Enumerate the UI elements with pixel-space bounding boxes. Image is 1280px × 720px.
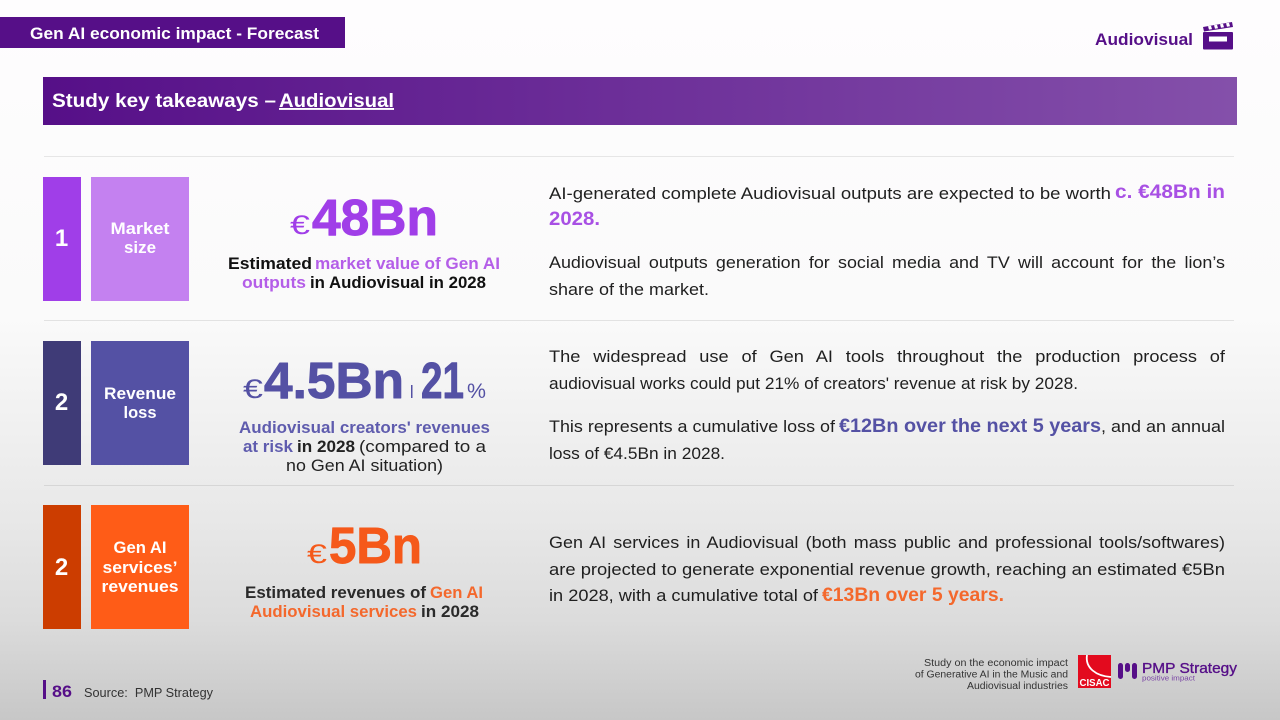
label: gen AI services' revenues: Gen AI xyxy=(114,538,166,557)
stat description: in 2028 xyxy=(297,438,355,456)
body text xyxy=(549,534,1225,606)
stat: 48Bn: € xyxy=(290,210,310,240)
stat description: Estimated xyxy=(228,255,312,273)
body text: This represents a cumulative loss of xyxy=(549,418,835,436)
logo: PMP Strategy xyxy=(1118,661,1238,682)
stat description xyxy=(245,584,483,621)
panel: market size xyxy=(43,177,1225,301)
label: revenue loss: Revenue xyxy=(104,384,176,403)
icon: clapperboard xyxy=(1203,22,1233,50)
stat description: Audiovisual creators' revenues xyxy=(239,419,490,437)
number tab 2 xyxy=(43,341,81,465)
study caption xyxy=(915,658,1068,692)
label: gen AI services' revenues xyxy=(91,505,189,629)
stat description: outputs xyxy=(242,274,306,292)
body text: The widespread use of Gen AI tools throughout the production process of xyxy=(549,348,1225,366)
logo: PMP Strategy: PMP Strategy xyxy=(1142,661,1238,677)
stat description: Gen AI xyxy=(430,584,483,602)
stat: 48Bn: 48Bn xyxy=(312,189,438,246)
number tab 1: 1 xyxy=(55,225,68,252)
label: revenue loss: loss xyxy=(124,403,156,422)
body text: 2028. xyxy=(549,209,600,230)
body text: €12Bn over the next 5 years xyxy=(839,416,1101,437)
body text: , and an annual xyxy=(1101,418,1225,436)
title banner: Study key takeaways – xyxy=(52,91,276,112)
logo: PMP Strategy: positive impact xyxy=(1142,674,1196,682)
body text: Gen AI services in Audiovisual (both mass public and professional tools/softwares) xyxy=(549,534,1225,552)
source note: Source: PMP Strategy xyxy=(84,686,214,700)
title banner xyxy=(43,77,1237,125)
label: market size: size xyxy=(124,238,156,257)
label: gen AI services' revenues: revenues xyxy=(102,577,178,596)
body text: in 2028, with a cumulative total of xyxy=(549,587,818,605)
audiovisual category label with icon xyxy=(1095,22,1233,50)
body text: share of the market. xyxy=(549,281,709,299)
section tag: forecast xyxy=(0,17,345,48)
stat description: Audiovisual services xyxy=(250,603,417,621)
body text xyxy=(549,348,1225,463)
body text xyxy=(549,182,1225,299)
label: market size: Market xyxy=(110,219,170,238)
number tab 2: 2 xyxy=(55,554,68,581)
study caption: Study on the economic impact xyxy=(924,658,1068,669)
body text: audiovisual works could put 21% of creators' revenue at risk by 2028. xyxy=(549,375,1078,393)
stat description: market value of Gen AI xyxy=(315,255,500,273)
stat: 5Bn: € xyxy=(307,539,327,569)
panel: gen AI services revenues xyxy=(43,505,1225,629)
stat description: (compared to a xyxy=(359,438,487,456)
stat description xyxy=(239,419,490,475)
body text: Audiovisual outputs generation for social media and TV will account for the lion’s xyxy=(549,254,1225,272)
body text: are projected to generate exponential revenue growth, reaching an estimated €5Bn xyxy=(549,561,1225,579)
stat description: in 2028 xyxy=(421,603,479,621)
stat description xyxy=(228,255,500,292)
number tab 2 xyxy=(43,505,81,629)
stat description: in Audiovisual in 2028 xyxy=(310,274,486,292)
stat: 4.5Bn and 21%: 4.5Bn xyxy=(264,352,404,409)
body text: loss of €4.5Bn in 2028. xyxy=(549,445,725,463)
number tab 2: 2 xyxy=(55,389,68,416)
body text: c. €48Bn in xyxy=(1115,182,1225,203)
logo: CISAC: CISAC xyxy=(1080,677,1110,689)
study caption: Audiovisual industries xyxy=(967,681,1068,692)
body text: AI-generated complete Audiovisual outputs are expected to be worth xyxy=(549,185,1111,203)
stat description: no Gen AI situation) xyxy=(286,457,443,475)
label: revenue loss xyxy=(91,341,189,465)
label: market size xyxy=(91,177,189,301)
page number xyxy=(43,680,72,701)
number tab 1 xyxy=(43,177,81,301)
study caption: of Generative AI in the Music and xyxy=(915,670,1068,680)
logo: CISAC xyxy=(1078,655,1111,689)
title banner: Audiovisual xyxy=(279,91,394,112)
stat description: at risk xyxy=(243,438,294,456)
label: gen AI services' revenues: services’ xyxy=(102,558,178,577)
stat: 4.5Bn and 21% xyxy=(243,352,486,409)
section tag: forecast: Gen AI economic impact - Forecast xyxy=(30,24,319,43)
stat: 4.5Bn and 21%: € xyxy=(243,374,263,404)
audiovisual category label with icon: Audiovisual xyxy=(1095,30,1193,49)
panel: revenue loss xyxy=(43,341,1225,475)
stat description: Estimated revenues of xyxy=(245,584,427,602)
body text: €13Bn over 5 years. xyxy=(822,585,1004,606)
stat: 4.5Bn and 21%: 21 xyxy=(421,352,464,409)
stat: 4.5Bn and 21%: % xyxy=(467,380,486,403)
page number: 86 xyxy=(52,682,72,701)
stat: 5Bn: 5Bn xyxy=(329,517,422,574)
